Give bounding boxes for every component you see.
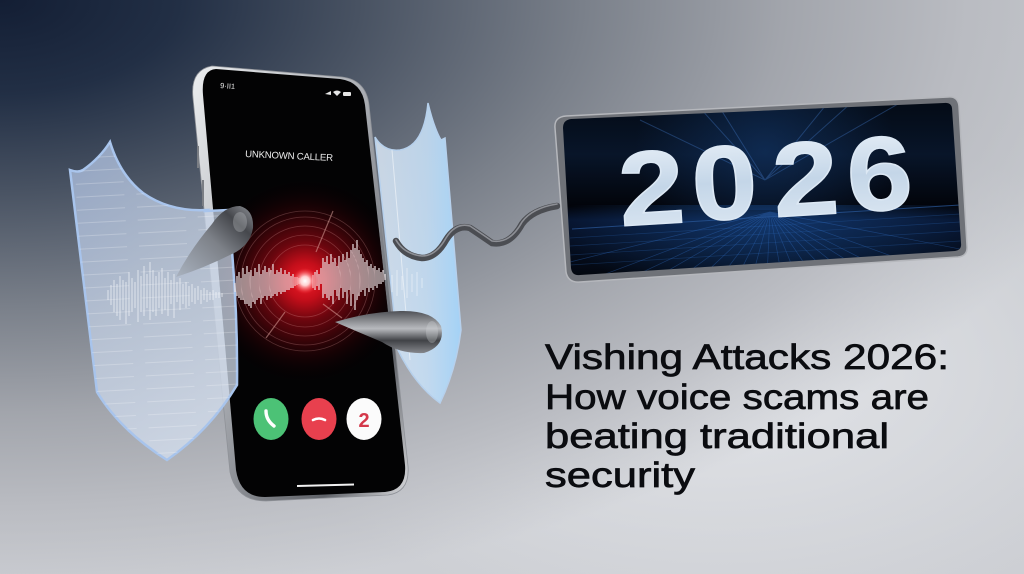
answer button — [254, 398, 288, 440]
year digits — [615, 113, 916, 249]
red core — [292, 268, 318, 294]
right shield — [375, 103, 461, 403]
waveform on the screen — [235, 240, 385, 310]
status time: 9·II1 — [220, 81, 235, 91]
title: Vishing Attacks 2026: — [545, 338, 949, 377]
left shield — [70, 142, 237, 460]
decline button — [302, 398, 336, 440]
illustration canvas — [68, 66, 968, 502]
waveform on the shield — [108, 262, 222, 324]
badge button: 2 — [358, 410, 370, 432]
red glow with rings — [234, 195, 388, 367]
metal drop upper — [176, 206, 253, 277]
unknown caller label: UNKNOWN CALLER — [245, 149, 333, 164]
panel bezel — [555, 97, 967, 282]
home bar — [297, 484, 354, 486]
badge button — [346, 398, 382, 440]
phone frame — [193, 66, 408, 501]
year digits: 0 — [688, 122, 761, 244]
right shield waveform — [392, 268, 422, 298]
phone screen — [203, 69, 405, 497]
connector wire — [396, 204, 557, 258]
title: How voice scams are — [545, 378, 929, 417]
title: security — [545, 456, 696, 495]
panel display — [563, 103, 961, 275]
title — [545, 338, 949, 495]
phone — [193, 66, 410, 501]
year digits: 6 — [843, 113, 916, 235]
title: beating traditional — [545, 417, 889, 456]
year digits: 2 — [769, 118, 842, 240]
metal drop lower — [335, 311, 442, 353]
2026 screen panel — [555, 97, 970, 285]
rays and floor grid — [570, 105, 960, 274]
year digits: 2 — [615, 127, 688, 249]
status icons — [325, 90, 351, 96]
side buttons — [198, 146, 203, 206]
